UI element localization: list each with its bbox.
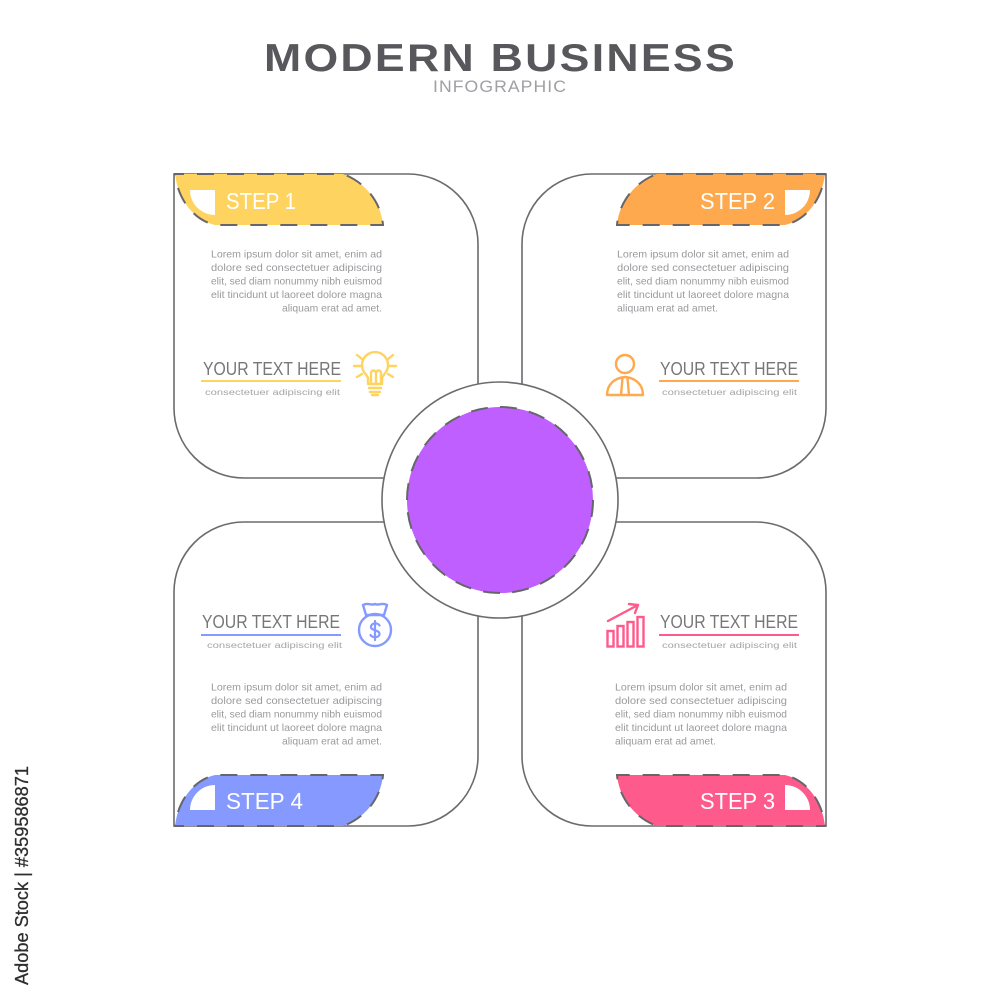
- step 2 heading: [659, 358, 799, 397]
- step 3 heading: consectetuer adipiscing elit: [662, 641, 798, 650]
- panel: step 3: [522, 522, 826, 826]
- title: [264, 37, 737, 96]
- step 3 body text: dolore sed consectetuer adipiscing: [615, 696, 787, 707]
- step 4 body text: elit, sed diam nonummy nibh euismod: [211, 710, 382, 720]
- step 2 body text: dolore sed consectetuer adipiscing: [617, 263, 789, 274]
- step 1 body text: Lorem ipsum dolor sit amet, enim ad: [211, 250, 382, 260]
- step 3 tab: STEP 3: [700, 788, 775, 814]
- icon: growth chart: [608, 604, 644, 646]
- step 1 body text: elit, sed diam nonummy nibh euismod: [211, 276, 382, 288]
- step 3 body text: aliquam erat ad amet.: [615, 736, 716, 748]
- panel 3 outline: [522, 522, 826, 826]
- panel 2 outline: [522, 174, 826, 478]
- panel: step 2: [522, 174, 826, 478]
- step 3 body text: elit tincidunt ut laoreet dolore magna: [615, 723, 787, 734]
- step 1 body text: dolore sed consectetuer adipiscing: [211, 263, 382, 274]
- icon: money bag: [359, 604, 391, 646]
- step 2 tab: [617, 174, 825, 225]
- centre circle: [382, 382, 618, 618]
- step 1 body text: aliquam erat ad amet.: [282, 304, 382, 314]
- panel 1 outline: [174, 174, 478, 478]
- step 1 heading: YOUR TEXT HERE: [203, 358, 341, 379]
- title: MODERN BUSINESS: [264, 37, 737, 80]
- step 1 body text: [211, 250, 382, 314]
- step 2 heading: YOUR TEXT HERE: [660, 358, 798, 379]
- step 4 heading: [201, 611, 343, 650]
- step 3 body text: [615, 682, 787, 748]
- step 4 body text: elit tincidunt ut laoreet dolore magna: [211, 723, 382, 734]
- step 2 body text: Lorem ipsum dolor sit amet, enim ad: [617, 250, 789, 260]
- step 4 body text: [211, 682, 382, 748]
- icon: business person: [607, 355, 643, 395]
- step 4 heading: consectetuer adipiscing elit: [207, 641, 343, 650]
- stock id: Adobe Stock | #359586871: [12, 766, 32, 985]
- step 4 tab: STEP 4: [226, 788, 303, 814]
- subtitle: INFOGRAPHIC: [433, 78, 567, 96]
- step 4 body text: Lorem ipsum dolor sit amet, enim ad: [211, 682, 382, 694]
- purple disc: [407, 407, 593, 593]
- step 1 body text: elit tincidunt ut laoreet dolore magna: [211, 290, 382, 301]
- step 2 body text: aliquam erat ad amet.: [617, 304, 718, 314]
- step 3 heading: [659, 611, 799, 650]
- step 4 heading: YOUR TEXT HERE: [202, 611, 340, 632]
- step 2 tab: STEP 2: [700, 188, 775, 214]
- panel: step 4: [174, 522, 478, 826]
- icon: light bulb: [354, 352, 396, 395]
- step 2 body text: elit tincidunt ut laoreet dolore magna: [617, 290, 789, 301]
- step 3 body text: Lorem ipsum dolor sit amet, enim ad: [615, 682, 787, 694]
- step 3 heading: YOUR TEXT HERE: [660, 611, 798, 632]
- panel: step 1: [174, 174, 478, 478]
- step 2 body text: elit, sed diam nonummy nibh euismod: [617, 276, 789, 288]
- step 3 tab: [617, 775, 825, 826]
- step 4 body text: dolore sed consectetuer adipiscing: [211, 696, 382, 707]
- step 4 tab: [175, 775, 383, 826]
- step 1 heading: [201, 358, 341, 397]
- step 2 body text: [617, 250, 789, 314]
- step 1 tab: STEP 1: [226, 188, 296, 214]
- step 1 heading: consectetuer adipiscing elit: [205, 388, 341, 397]
- step 4 body text: aliquam erat ad amet.: [282, 736, 382, 748]
- step 1 tab: [175, 174, 383, 225]
- step 2 heading: consectetuer adipiscing elit: [662, 388, 798, 397]
- step 3 body text: elit, sed diam nonummy nibh euismod: [615, 710, 787, 720]
- panel 4 outline: [174, 522, 478, 826]
